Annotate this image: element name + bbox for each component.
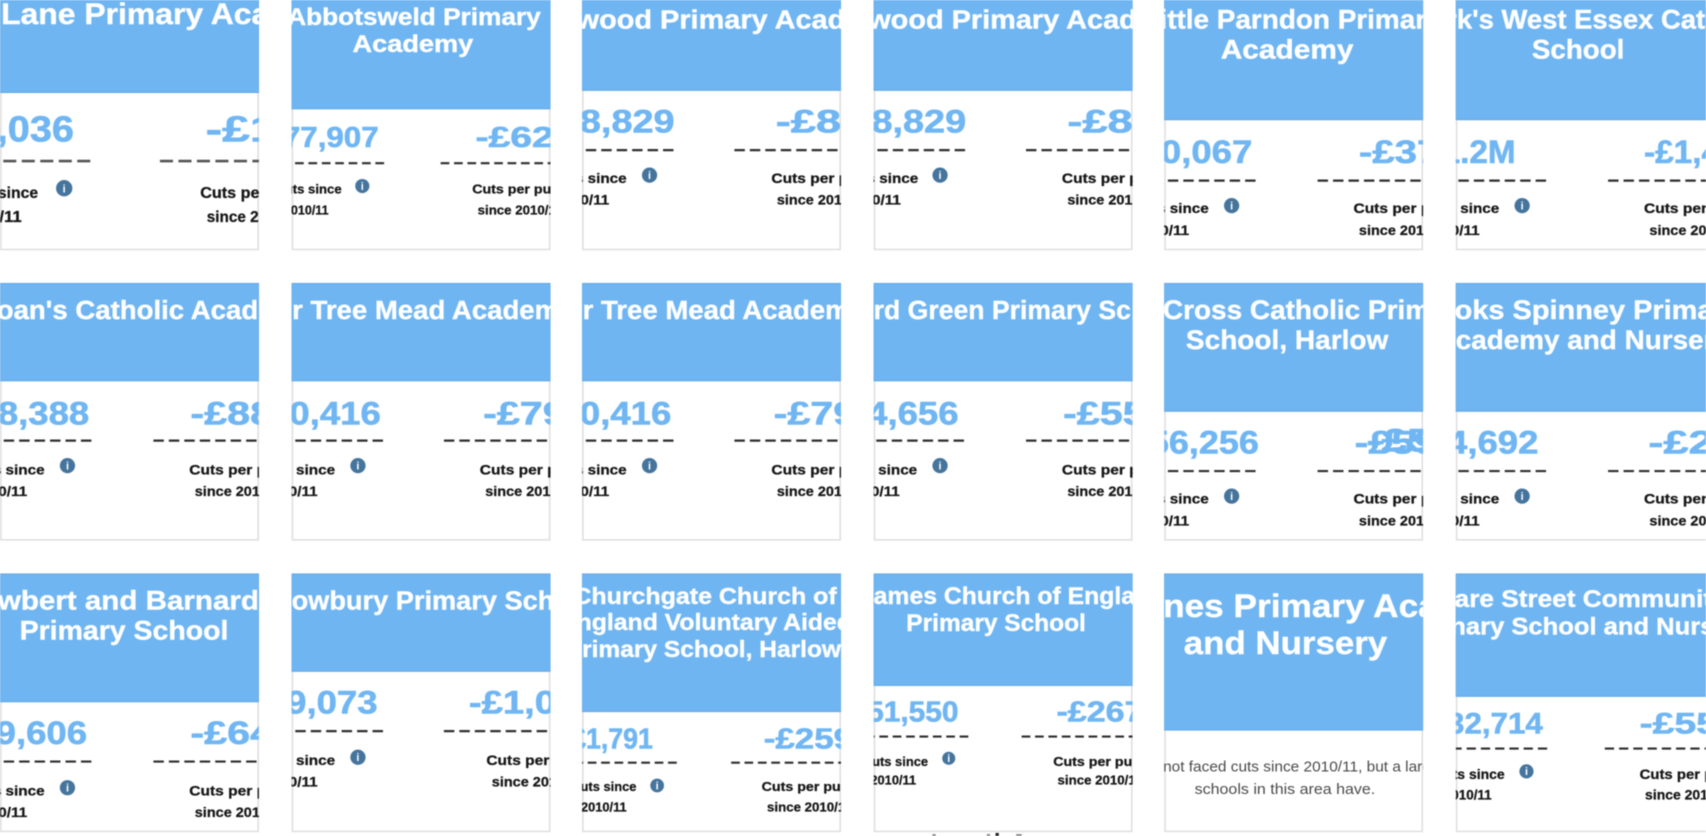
cuts per pupil label: [771, 170, 876, 208]
total cuts value: 51,550: [867, 695, 959, 727]
school name: [1450, 586, 1706, 640]
cuts per pupil label: [189, 782, 294, 820]
school name: wood Primary Academy: [867, 4, 1195, 34]
card: Little Parndon Primary Academy: [1132, 0, 1458, 250]
school name: [1095, 294, 1472, 355]
cuts per pupil label: [200, 185, 309, 226]
total cuts label: [841, 170, 918, 208]
card: Fir Tree Mead Academy (2): [549, 282, 876, 541]
cuts per pupil label: [1353, 491, 1458, 528]
cuts per pupil label: Cuts per pupil: [1353, 200, 1458, 216]
school name: nes Primary Academy: [1163, 587, 1530, 624]
school name: [1163, 587, 1530, 661]
icon: info: [60, 458, 75, 473]
total cuts value: 4,692: [1447, 424, 1538, 461]
header band: [1164, 283, 1423, 411]
cuts per pupil label: since 2010/11: [195, 483, 287, 499]
total cuts value: 8,388: [0, 394, 89, 431]
header band: [1164, 0, 1423, 120]
total cuts label: Cuts since: [571, 779, 636, 794]
no cuts message: [1163, 759, 1439, 798]
icon: info: [1515, 489, 1530, 504]
cuts per pupil label: [1644, 200, 1706, 238]
school name: rimary School, Harlow: [582, 636, 842, 662]
school name: ngland Voluntary Aided: [577, 609, 852, 635]
total cuts label: 2010/11: [846, 192, 901, 208]
cuts per pupil value: -£37: [1359, 133, 1439, 170]
cuts per pupil label: since 2010/11: [207, 209, 305, 226]
total cuts label: [863, 754, 928, 787]
cuts per pupil value, overlapping: -£5: [1367, 422, 1432, 459]
icon: info: i: [356, 752, 359, 764]
total cuts label: 2010/11: [845, 483, 900, 499]
total cuts label: [0, 782, 45, 820]
icon: info: i: [1521, 491, 1524, 503]
header band: [0, 574, 259, 702]
icon: info: [650, 779, 664, 792]
cuts per pupil value: -£259: [764, 723, 853, 755]
header band: [1456, 0, 1706, 120]
total cuts label: 2010/11: [1425, 512, 1480, 528]
header band: [874, 283, 1133, 381]
cuts per pupil value: -£8: [1067, 103, 1133, 140]
icon: info: [642, 458, 657, 473]
icon: info: i: [648, 170, 651, 182]
card: wood Primary Academy (2): [841, 0, 1195, 250]
cuts per pupil label: since 2010/11: [478, 202, 563, 217]
card: Holy Cross Catholic Primary School, Harlow: [1095, 282, 1472, 541]
cuts per pupil value: -£64: [190, 714, 273, 751]
school name: oan's Catholic Academy: [0, 295, 314, 325]
card: Fawbert and Barnard Primary School: [0, 572, 294, 832]
total cuts label: Cuts since: [841, 170, 918, 186]
cuts per pupil value: -£79: [774, 394, 856, 431]
school name: Primary School: [20, 615, 228, 646]
school name: Holy Cross Catholic Primary: [1095, 294, 1472, 325]
header band: [582, 0, 841, 90]
total cuts label: [1132, 200, 1209, 238]
no cuts message: not faced cuts since 2010/11, but a large: [1163, 759, 1439, 775]
cuts per pupil label: [762, 779, 857, 815]
total cuts label: Cuts since: [1422, 491, 1499, 507]
cuts per pupil value: -£79: [483, 394, 566, 431]
card: rd Green Primary School: [840, 282, 1187, 541]
cuts per pupil value: -£62: [475, 121, 554, 153]
total cuts label: Cuts since: [840, 461, 917, 477]
icon: info: i: [66, 783, 69, 795]
school name: Fir Tree Mead Academy: [558, 295, 865, 325]
school name: are Street Community: [1455, 586, 1706, 613]
icon: info: [1515, 198, 1530, 213]
icon: info: [56, 180, 72, 196]
header band: [582, 283, 841, 381]
icon: info: i: [1525, 766, 1528, 778]
school name: [1142, 3, 1442, 65]
total cuts label: Cuts since: [1434, 767, 1505, 782]
total cuts label: 2010/11: [284, 202, 329, 217]
card: Fir Tree Mead Academy (1): [258, 282, 584, 541]
icon: info: i: [356, 460, 359, 472]
total cuts value: 0,416: [289, 394, 381, 431]
icon: info: [1224, 489, 1239, 504]
total cuts label: 2010/11: [1135, 512, 1189, 528]
icon: info: [1224, 198, 1239, 213]
total cuts value: 9,073: [286, 684, 378, 721]
cuts per pupil label: since 2010/11: [777, 483, 869, 499]
icon: info: i: [656, 780, 659, 792]
total cuts label: 2010/11: [1425, 222, 1480, 238]
total cuts label: Cuts since: [275, 182, 342, 197]
cuts per pupil value, overlapping: -£59: [1355, 424, 1437, 461]
icon: info: [350, 458, 366, 473]
cuts per pupil label: [1640, 767, 1706, 803]
card: are Street Community Primary School and Nursery: [1434, 572, 1706, 832]
total cuts label: [275, 182, 342, 217]
total cuts label: [840, 461, 917, 499]
header band: [874, 0, 1133, 90]
school name: rd Green Primary School: [874, 295, 1187, 325]
card: Lane Primary Academy: [0, 0, 353, 250]
cuts per pupil value: -£88: [190, 394, 273, 431]
school name: Churchgate Church of: [573, 583, 837, 609]
cuts per pupil label: Cuts per pupil: [189, 782, 294, 798]
icon: info: [932, 458, 948, 473]
total cuts label: Cuts since: [549, 170, 627, 186]
clipped text fragments below the James Church card: [932, 833, 1022, 836]
cuts per pupil label: Cuts per pupil: [480, 461, 584, 477]
cuts per pupil label: [189, 461, 294, 499]
cuts per pupil value: -£1: [206, 109, 277, 149]
school name: Fir Tree Mead Academy: [268, 295, 575, 325]
card: St Mark's West Essex Catholic School: [1373, 0, 1706, 250]
total cuts label: 2010/11: [1135, 222, 1189, 238]
cuts per pupil label: [486, 752, 591, 790]
card: oks Spinney Primary Academy and Nursery: [1422, 282, 1706, 541]
cuts per pupil label: [1053, 754, 1149, 787]
cuts per pupil label: [1644, 491, 1706, 528]
total cuts value: 1.2M: [1442, 133, 1516, 170]
cuts per pupil label: [1062, 461, 1166, 499]
icon: info: [60, 780, 75, 795]
cuts per pupil label: Cuts per pupil: [762, 779, 857, 794]
cuts per pupil label: Cuts per pupil: [200, 185, 309, 202]
school name: Academy: [1221, 34, 1353, 65]
cuts per pupil label: since 2010/11: [492, 774, 584, 790]
total cuts value: 56,256: [1149, 424, 1259, 461]
header band: [1164, 574, 1423, 730]
total cuts label: Cuts since: [258, 752, 335, 768]
card: Abbotsweld Primary Academy: [275, 0, 568, 250]
cuts per pupil value: -£1,0: [469, 684, 556, 721]
total cuts label: [0, 185, 38, 226]
total cuts label: 2010/11: [581, 800, 627, 815]
cuts per pupil label: since 2010/11: [195, 804, 287, 820]
total cuts label: 2010/11: [263, 774, 318, 790]
school name: ames Church of England: [874, 583, 1165, 610]
cuts per pupil label: Cuts per pupil: [189, 461, 294, 477]
header band: [292, 283, 551, 381]
total cuts value: 8,829: [871, 103, 966, 140]
header band: [0, 283, 259, 381]
icon: info: [1519, 764, 1534, 778]
total cuts label: Cuts since: [1422, 200, 1499, 216]
school name: wood Primary Academy: [576, 4, 904, 34]
cuts per pupil label: [472, 182, 568, 217]
card: owbury Primary School: [258, 572, 595, 832]
cuts per pupil label: since 2010/11: [1359, 222, 1452, 238]
cuts per pupil label: since 2010/11: [1359, 512, 1452, 528]
cuts per pupil value: -£8: [776, 103, 841, 140]
cuts per pupil label: since 2010/11: [1067, 192, 1160, 208]
school name: School: [1532, 34, 1624, 65]
school name: [573, 583, 852, 662]
total cuts label: [0, 461, 45, 499]
icon: info: i: [947, 753, 950, 765]
total cuts label: 2010/11: [555, 192, 609, 208]
total cuts label: 2010/11: [263, 483, 318, 499]
cuts per pupil label: since 2010/11: [777, 192, 869, 208]
total cuts label: [549, 461, 627, 499]
school name: and Nursery: [1184, 624, 1387, 661]
total cuts value: 0,067: [1161, 133, 1252, 170]
school name: owbury Primary School: [292, 585, 595, 615]
icon: info: [942, 752, 955, 765]
icon: info: i: [1230, 200, 1233, 212]
icon: info: [355, 179, 369, 193]
total cuts label: Cuts since: [1132, 491, 1209, 507]
total cuts label: [1434, 767, 1505, 803]
total cuts label: 2010/11: [1444, 788, 1492, 803]
total cuts label: 2010/11: [870, 772, 916, 787]
header band: [874, 574, 1133, 685]
school name: [287, 4, 541, 58]
header band: [582, 574, 841, 712]
total cuts label: Cuts since: [549, 461, 627, 477]
icon: info: [642, 168, 657, 183]
total cuts value: 0,416: [580, 394, 671, 431]
icon: info: i: [66, 460, 69, 472]
cuts per pupil value: -£2: [1648, 424, 1706, 461]
school name: [1373, 3, 1706, 65]
header band: [292, 574, 551, 671]
total cuts label: [258, 461, 335, 499]
total cuts label: [1132, 491, 1209, 528]
header band: [0, 0, 259, 92]
school name: wbert and Barnard: [0, 584, 259, 615]
total cuts label: Cuts since: [1132, 200, 1209, 216]
cuts per pupil label: Cuts per pupil: [1062, 461, 1166, 477]
school name: [1455, 294, 1706, 355]
cuts per pupil label: since 2010/11: [1058, 772, 1142, 787]
total cuts label: 2010/11: [555, 483, 609, 499]
cuts per pupil label: [480, 461, 584, 499]
total cuts value: 4,656: [867, 394, 959, 431]
cuts per pupil label: Cuts per pupil: [771, 461, 876, 477]
no cuts message: schools in this area have.: [1195, 782, 1375, 798]
cuts per pupil value: -£55: [1063, 394, 1146, 431]
total cuts value: 77,907: [283, 121, 379, 153]
school name: [874, 583, 1165, 637]
header band: [292, 0, 551, 109]
total cuts label: [549, 170, 627, 208]
cuts per pupil label: [771, 461, 876, 499]
icon: info: i: [1230, 491, 1233, 503]
total cuts value: 32,714: [1447, 707, 1543, 740]
school name: [0, 584, 259, 646]
cuts per pupil label: since 2010/11: [485, 483, 578, 499]
cuts per pupil value: -£55: [1640, 707, 1706, 740]
cuts per pupil label: Cuts per pupil: [1053, 754, 1149, 769]
cuts per pupil label: Cuts per pupil: [771, 170, 876, 186]
icon: info: [350, 750, 366, 765]
total cuts value: 8,829: [580, 103, 675, 140]
icon: info: i: [1521, 200, 1524, 212]
icon: info: i: [939, 460, 942, 472]
cuts per pupil label: since 2010/11: [1067, 483, 1160, 499]
card: James Church of England Primary School: [863, 572, 1165, 832]
cuts per pupil label: Cuts per pupil: [1353, 491, 1458, 507]
school name: Abbotsweld Primary: [287, 4, 541, 31]
icon: info: i: [648, 460, 651, 472]
card: nes Primary Academy and Nursery: [1163, 572, 1530, 832]
header band: [1456, 574, 1706, 696]
school name: Primary School: [906, 610, 1086, 637]
total cuts label: Cuts since: [863, 754, 928, 769]
total cuts label: [1422, 491, 1499, 528]
total cuts label: [258, 752, 335, 790]
cuts per pupil label: Cuts per pupil: [1062, 170, 1166, 186]
icon: info: i: [361, 181, 364, 193]
card: Churchgate Church of England Voluntary Aided Primary School, Harlow: [571, 572, 857, 832]
total cuts label: [571, 779, 636, 815]
school name: School, Harlow: [1186, 324, 1389, 355]
icon: info: [932, 168, 948, 183]
cuts per pupil label: Cuts per pupil: [472, 182, 568, 197]
cuts per pupil label: [1353, 200, 1458, 238]
card: oan's Catholic Academy: [0, 282, 314, 541]
cuts per pupil label: Cuts per pupil: [486, 752, 591, 768]
card: wood Primary Academy (1): [549, 0, 904, 250]
icon: info: i: [63, 184, 66, 196]
school name: Little Parndon Primary: [1142, 3, 1442, 34]
icon: info: i: [939, 170, 942, 182]
total cuts label: [1422, 200, 1499, 238]
cuts per pupil label: [1062, 170, 1166, 208]
cuts per pupil label: since 2010/11: [767, 800, 852, 815]
cuts per pupil value: -£267: [1056, 695, 1143, 727]
header band: [1456, 283, 1706, 411]
total cuts label: Cuts since: [258, 461, 335, 477]
school name: Academy: [353, 31, 474, 58]
total cuts value: £1,791: [571, 723, 653, 755]
